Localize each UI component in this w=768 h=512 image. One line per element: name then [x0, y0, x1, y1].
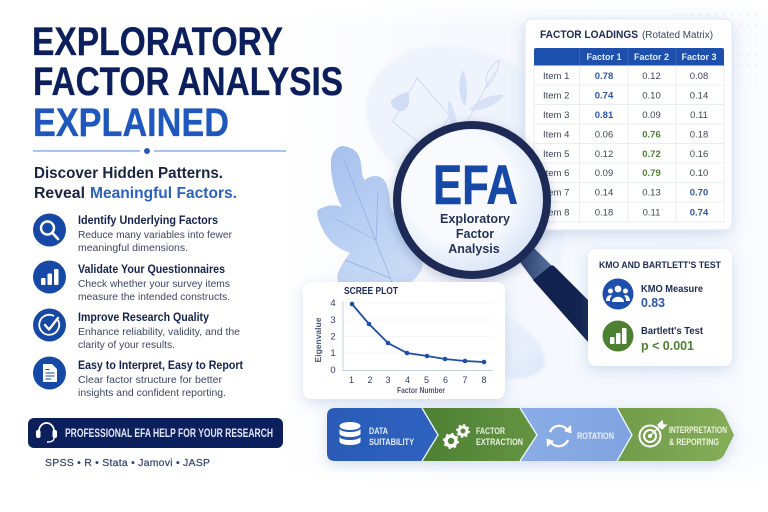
x axis labels — [349, 375, 487, 385]
benefit: validate your questionnaires: Validate Your Questionnaires — [78, 262, 225, 276]
benefit: identify underlying factors: Identify Underlying Factors — [78, 213, 218, 227]
table rows: 0.76 — [642, 130, 661, 140]
step 4: interpretation and reporting: INTERPRETATION — [669, 425, 727, 435]
decorative dot grid — [676, 14, 758, 86]
benefit: improve research quality: Enhance reliability, validity, and the — [78, 326, 240, 338]
panel: factor loadings table: FACTOR LOADINGS — [540, 29, 638, 41]
lens text: Factor — [456, 227, 494, 241]
table rows: 0.78 — [595, 71, 613, 82]
y axis labels: 2 — [330, 332, 336, 342]
call-to-action banner: PROFESSIONAL EFA HELP FOR YOUR RESEARCH — [65, 428, 273, 440]
panel: scree plot: SCREE PLOT — [344, 285, 398, 297]
y axis labels: 4 — [330, 298, 336, 309]
step 1: data suitability: DATA — [369, 426, 388, 436]
x axis labels: 2 — [367, 375, 373, 385]
panel: scree plot — [303, 282, 505, 399]
table rows: 0.08 — [690, 71, 708, 82]
table rows: 0.18 — [595, 208, 613, 218]
title: FACTOR ANALYSIS — [33, 60, 343, 104]
table rows: 0.10 — [690, 168, 708, 179]
benefit: easy to interpret: Clear factor structure for better — [78, 374, 222, 386]
title: EXPLAINED — [33, 101, 229, 145]
table rows: Item 3 — [543, 110, 569, 121]
title: EXPLORATORY — [32, 20, 283, 64]
table rows: 0.70 — [690, 188, 708, 198]
table rows: 0.74 — [595, 90, 614, 102]
table rows: 0.16 — [690, 149, 708, 160]
table grid — [534, 66, 724, 222]
table header: Factor 2 — [634, 52, 669, 62]
panel: factor loadings table: (Rotated Matrix) — [642, 30, 713, 41]
table rows: 0.11 — [643, 208, 660, 218]
lens text — [433, 153, 518, 256]
x axis labels: 3 — [385, 375, 391, 385]
table rows: 0.14 — [690, 90, 708, 102]
lens text: EFA — [433, 153, 518, 216]
magnifying glass — [397, 125, 600, 356]
chart axes and grid — [343, 301, 493, 370]
x axis labels: 8 — [481, 375, 487, 385]
y axis labels: 1 — [330, 348, 336, 359]
benefit: validate your questionnaires: measure the intended constructs. — [78, 291, 230, 303]
panel: KMO and Bartlett's test: Bartlett's Test — [641, 326, 704, 337]
table rows: 0.11 — [690, 110, 708, 121]
icon: people — [602, 278, 634, 310]
magnifier handle — [520, 248, 600, 356]
panel: scree plot: Eigenvalue — [313, 317, 323, 362]
step 3: rotation: ROTATION — [577, 431, 614, 441]
process flow — [327, 408, 734, 461]
benefit: validate your questionnaires — [33, 260, 230, 303]
benefit: improve research quality — [33, 308, 240, 351]
subtitle — [34, 165, 237, 202]
table rows: 0.72 — [642, 149, 661, 160]
step 4: interpretation and reporting: & REPORTING — [669, 437, 719, 447]
table rows: Item 7 — [543, 188, 569, 198]
table rows: 0.74 — [690, 208, 709, 218]
table rows: 0.13 — [642, 188, 661, 198]
table rows: 0.14 — [595, 188, 613, 198]
decorative faint sketch: leaves and paper — [391, 60, 504, 150]
panel: KMO and Bartlett's test: KMO Measure — [641, 284, 703, 295]
benefit: easy to interpret — [33, 356, 243, 399]
panel: KMO and Bartlett's test: 0.83 — [641, 295, 665, 310]
step 2: factor extraction: EXTRACTION — [476, 437, 523, 447]
table rows: Item 8 — [543, 208, 569, 218]
table rows: 0.81 — [595, 110, 614, 121]
table rows: 0.09 — [642, 110, 661, 121]
table rows: 0.06 — [595, 130, 613, 140]
panel: scree plot: Factor Number — [397, 385, 446, 395]
y axis labels: 3 — [330, 315, 336, 326]
table rows: 0.79 — [642, 168, 661, 179]
chevron separators — [422, 408, 632, 461]
lens text: Analysis — [448, 242, 500, 256]
call-to-action banner — [28, 418, 283, 448]
step 4: interpretation and reporting — [617, 408, 734, 461]
table rows: 0.10 — [642, 90, 661, 102]
x axis labels: 7 — [462, 375, 468, 385]
benefit: identify underlying factors: Reduce many variables into fewer — [78, 229, 232, 241]
table rows: 0.09 — [595, 168, 613, 179]
table rows: Item 6 — [543, 168, 569, 179]
x axis labels: 5 — [424, 375, 429, 385]
subtitle: Meaningful Factors. — [90, 185, 237, 202]
table rows: Item 4 — [543, 130, 569, 140]
subtitle: Discover Hidden Patterns. — [34, 165, 223, 182]
decorative blue leaf — [317, 146, 422, 285]
table rows: Item 5 — [543, 149, 569, 160]
y axis labels: 0 — [330, 365, 336, 376]
benefit: improve research quality: clarity of your results. — [78, 339, 175, 351]
panel: KMO and Bartlett's test — [588, 249, 732, 366]
table rows: Item 2 — [543, 90, 569, 102]
table rows — [543, 71, 709, 218]
table rows: 0.18 — [690, 130, 708, 140]
benefit: easy to interpret: Easy to Interpret, Easy to Report — [78, 358, 243, 372]
step 1: data suitability — [327, 408, 438, 461]
x axis labels: 6 — [443, 375, 448, 385]
table rows: 0.12 — [642, 71, 661, 82]
icon: bars — [602, 320, 634, 352]
benefit: improve research quality: Improve Research Quality — [78, 310, 209, 324]
panel: factor loadings table — [525, 19, 732, 230]
step 2: factor extraction — [422, 408, 537, 461]
table rows: Item 1 — [543, 71, 569, 82]
y axis labels — [330, 298, 336, 376]
benefit: validate your questionnaires: Check whether your survey items — [78, 278, 230, 290]
scree line — [350, 302, 486, 364]
benefit: identify underlying factors — [33, 213, 232, 254]
benefit: identify underlying factors: meaningful dimensions. — [78, 242, 188, 254]
panel: KMO and Bartlett's test: p < 0.001 — [641, 338, 694, 353]
step 2: factor extraction: FACTOR — [476, 426, 505, 436]
subtitle: Reveal — [34, 185, 85, 202]
benefit: easy to interpret: insights and confident reporting. — [78, 387, 226, 399]
panel: KMO and Bartlett's test: KMO AND BARTLETT'S TEST — [599, 260, 721, 271]
title — [32, 20, 343, 145]
table header: Factor 1 — [586, 52, 622, 62]
x axis labels: 1 — [349, 375, 354, 385]
lens text: Exploratory — [440, 212, 510, 226]
x axis labels: 4 — [405, 375, 410, 385]
software list: SPSS • R • Stata • Jamovi • JASP — [45, 457, 210, 469]
title divider — [33, 148, 286, 154]
table header: Factor 3 — [681, 52, 717, 62]
table header — [534, 48, 724, 66]
step 1: data suitability: SUITABILITY — [369, 437, 414, 447]
step 3: rotation — [520, 408, 632, 461]
icon: headset — [36, 423, 57, 442]
table rows: 0.12 — [595, 149, 613, 160]
